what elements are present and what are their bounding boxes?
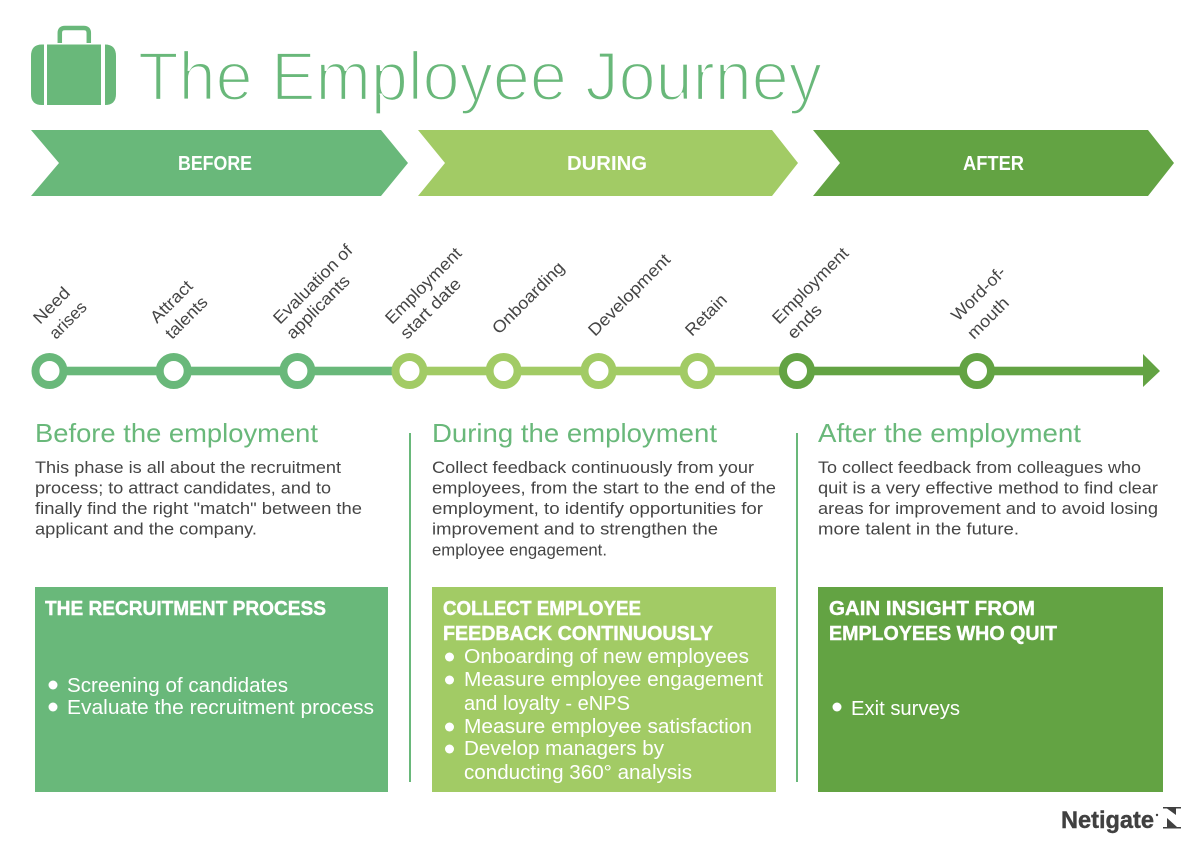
- text block: during description: improvement and to strengthen the: [432, 520, 718, 539]
- chevron: before: BEFORE: [178, 153, 252, 175]
- chevron: during: [418, 130, 798, 196]
- divider: [796, 433, 798, 782]
- chevron: after: AFTER: [963, 153, 1024, 175]
- text block: during description: employee engagement.: [432, 540, 607, 560]
- bullet list: conducting 360° analysis: [464, 762, 692, 784]
- panel heading: COLLECT EMPLOYEE: [443, 598, 641, 620]
- title: The Employee Journey: [138, 38, 822, 115]
- timeline labels: Development: [584, 250, 674, 340]
- text block: before description: This phase is all about the recruitment: [35, 458, 341, 477]
- column: during text: [432, 418, 776, 560]
- chevron: during: DURING: [567, 153, 647, 175]
- heading: after the employment: After the employment: [818, 418, 1082, 448]
- timeline labels: Need: [29, 283, 74, 328]
- bullet list: Onboarding of new employees: [464, 646, 749, 668]
- bullet list: Evaluate the recruitment process: [67, 697, 374, 719]
- logo: Netigate: Netigate: [1061, 807, 1154, 834]
- text block: after description: To collect feedback from colleagues who: [818, 458, 1141, 477]
- chevron: before: [31, 130, 408, 196]
- text block: before description: process; to attract candidates, and to: [35, 478, 331, 498]
- text block: during description: employees, from the start to the end of the: [432, 478, 776, 498]
- timeline labels: Employment: [381, 243, 466, 328]
- panel heading: [829, 598, 1057, 645]
- text block: after description: [818, 458, 1158, 539]
- text block: after description: quit is a very effective method to find clear: [818, 478, 1158, 498]
- timeline labels: talents: [161, 293, 212, 343]
- bullet list: Screening of candidates: [67, 675, 288, 697]
- panel heading: THE RECRUITMENT PROCESS: [45, 598, 326, 620]
- arrowhead: [1143, 354, 1160, 387]
- bullet list: [48, 675, 374, 719]
- panel: the recruitment process: [35, 587, 388, 792]
- timeline labels: [29, 241, 1013, 343]
- divider: [409, 433, 411, 782]
- bullet list: Measure employee engagement: [464, 669, 763, 691]
- timeline labels: Word-of-: [947, 263, 1010, 325]
- timeline labels: Evaluation of: [269, 241, 357, 328]
- panel heading: EMPLOYEES WHO QUIT: [829, 623, 1057, 645]
- panel: gain insight from employees who quit: [818, 587, 1163, 792]
- timeline: [36, 354, 1160, 387]
- text block: during description: Collect feedback continuously from your: [432, 458, 754, 477]
- text block: after description: areas for improvement and to avoid losing: [818, 499, 1158, 518]
- timeline labels: Employment: [768, 243, 853, 328]
- panel heading: [443, 598, 714, 645]
- text block: after description: more talent in the future.: [818, 520, 1019, 539]
- text block: during description: [432, 458, 776, 560]
- timeline labels: mouth: [963, 293, 1013, 343]
- text block: before description: finally find the right "match" between the: [35, 499, 362, 518]
- timeline labels: arises: [45, 298, 91, 343]
- timeline labels: start date: [396, 274, 465, 343]
- panel: collect employee feedback continuously: [432, 587, 776, 792]
- timeline labels: Onboarding: [488, 258, 568, 338]
- timeline nodes: [36, 357, 991, 385]
- bullet list: Measure employee satisfaction: [464, 716, 752, 738]
- panel heading: FEEDBACK CONTINUOUSLY: [443, 623, 714, 645]
- bullet list: Exit surveys: [851, 698, 960, 720]
- bullet list: and loyalty - eNPS: [464, 693, 630, 715]
- timeline labels: Attract: [146, 276, 197, 327]
- panel heading: GAIN INSIGHT FROM: [829, 598, 1035, 620]
- bullet list: [445, 646, 763, 784]
- heading: during the employment: During the employment: [432, 418, 718, 448]
- timeline labels: ends: [783, 300, 826, 343]
- column: before text: [35, 418, 362, 539]
- column: after text: [818, 418, 1158, 539]
- timeline labels: Retain: [681, 290, 731, 340]
- text block: before description: applicant and the company.: [35, 520, 257, 539]
- chevron: after: [813, 130, 1174, 196]
- text block: during description: employment, to identify opportunities for: [432, 499, 763, 518]
- bullet list: Develop managers by: [464, 738, 664, 760]
- icon: suitcase: [31, 28, 116, 105]
- heading: before the employment: Before the employment: [35, 418, 319, 448]
- timeline labels: applicants: [282, 271, 354, 343]
- text block: before description: [35, 458, 362, 539]
